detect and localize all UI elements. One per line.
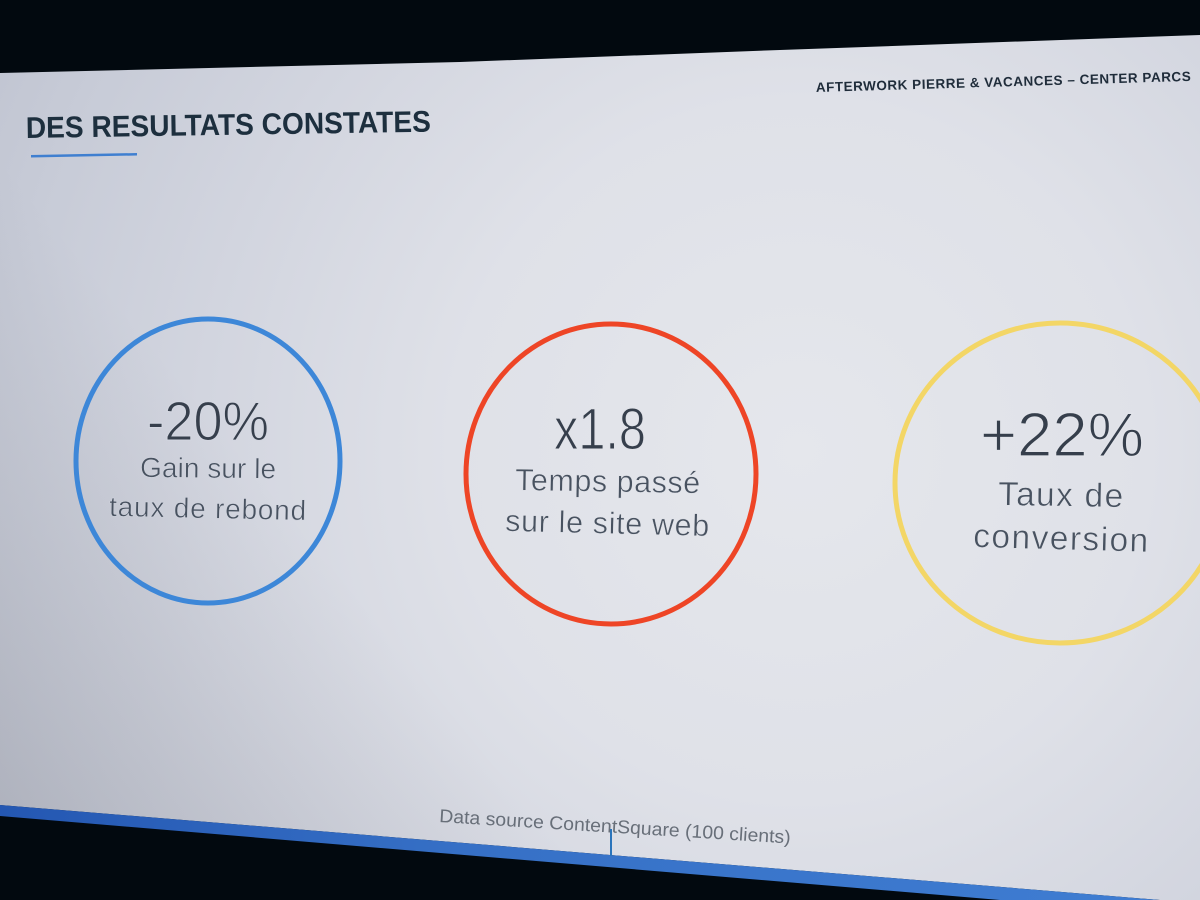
title underline <box>31 153 137 158</box>
data source note: Data source ContentSquare (100 clients) <box>439 805 791 847</box>
yellow circle <box>895 323 1200 643</box>
caption: Temps passé <box>515 463 700 500</box>
header label: AFTERWORK PIERRE & VACANCES – CENTER PARCS <box>816 69 1191 95</box>
value: -20% <box>147 390 269 452</box>
title: DES RESULTATS CONSTATES <box>26 106 431 145</box>
red circle <box>466 324 756 624</box>
caption: Taux de <box>998 476 1123 515</box>
metric: time on site <box>466 324 756 624</box>
caption: sur le site web <box>505 504 710 543</box>
caption <box>505 463 710 543</box>
bar tick <box>610 829 612 856</box>
caption <box>109 452 306 526</box>
caption: Gain sur le <box>140 452 276 484</box>
caption <box>973 476 1149 560</box>
caption: taux de rebond <box>109 491 306 526</box>
bottom blue bar <box>0 805 1160 900</box>
value: x1.8 <box>554 397 646 462</box>
metric: conversion <box>895 323 1200 643</box>
caption: conversion <box>973 518 1149 560</box>
blue circle <box>76 319 340 603</box>
value: +22% <box>980 401 1144 470</box>
metric: bounce rate <box>76 319 340 603</box>
